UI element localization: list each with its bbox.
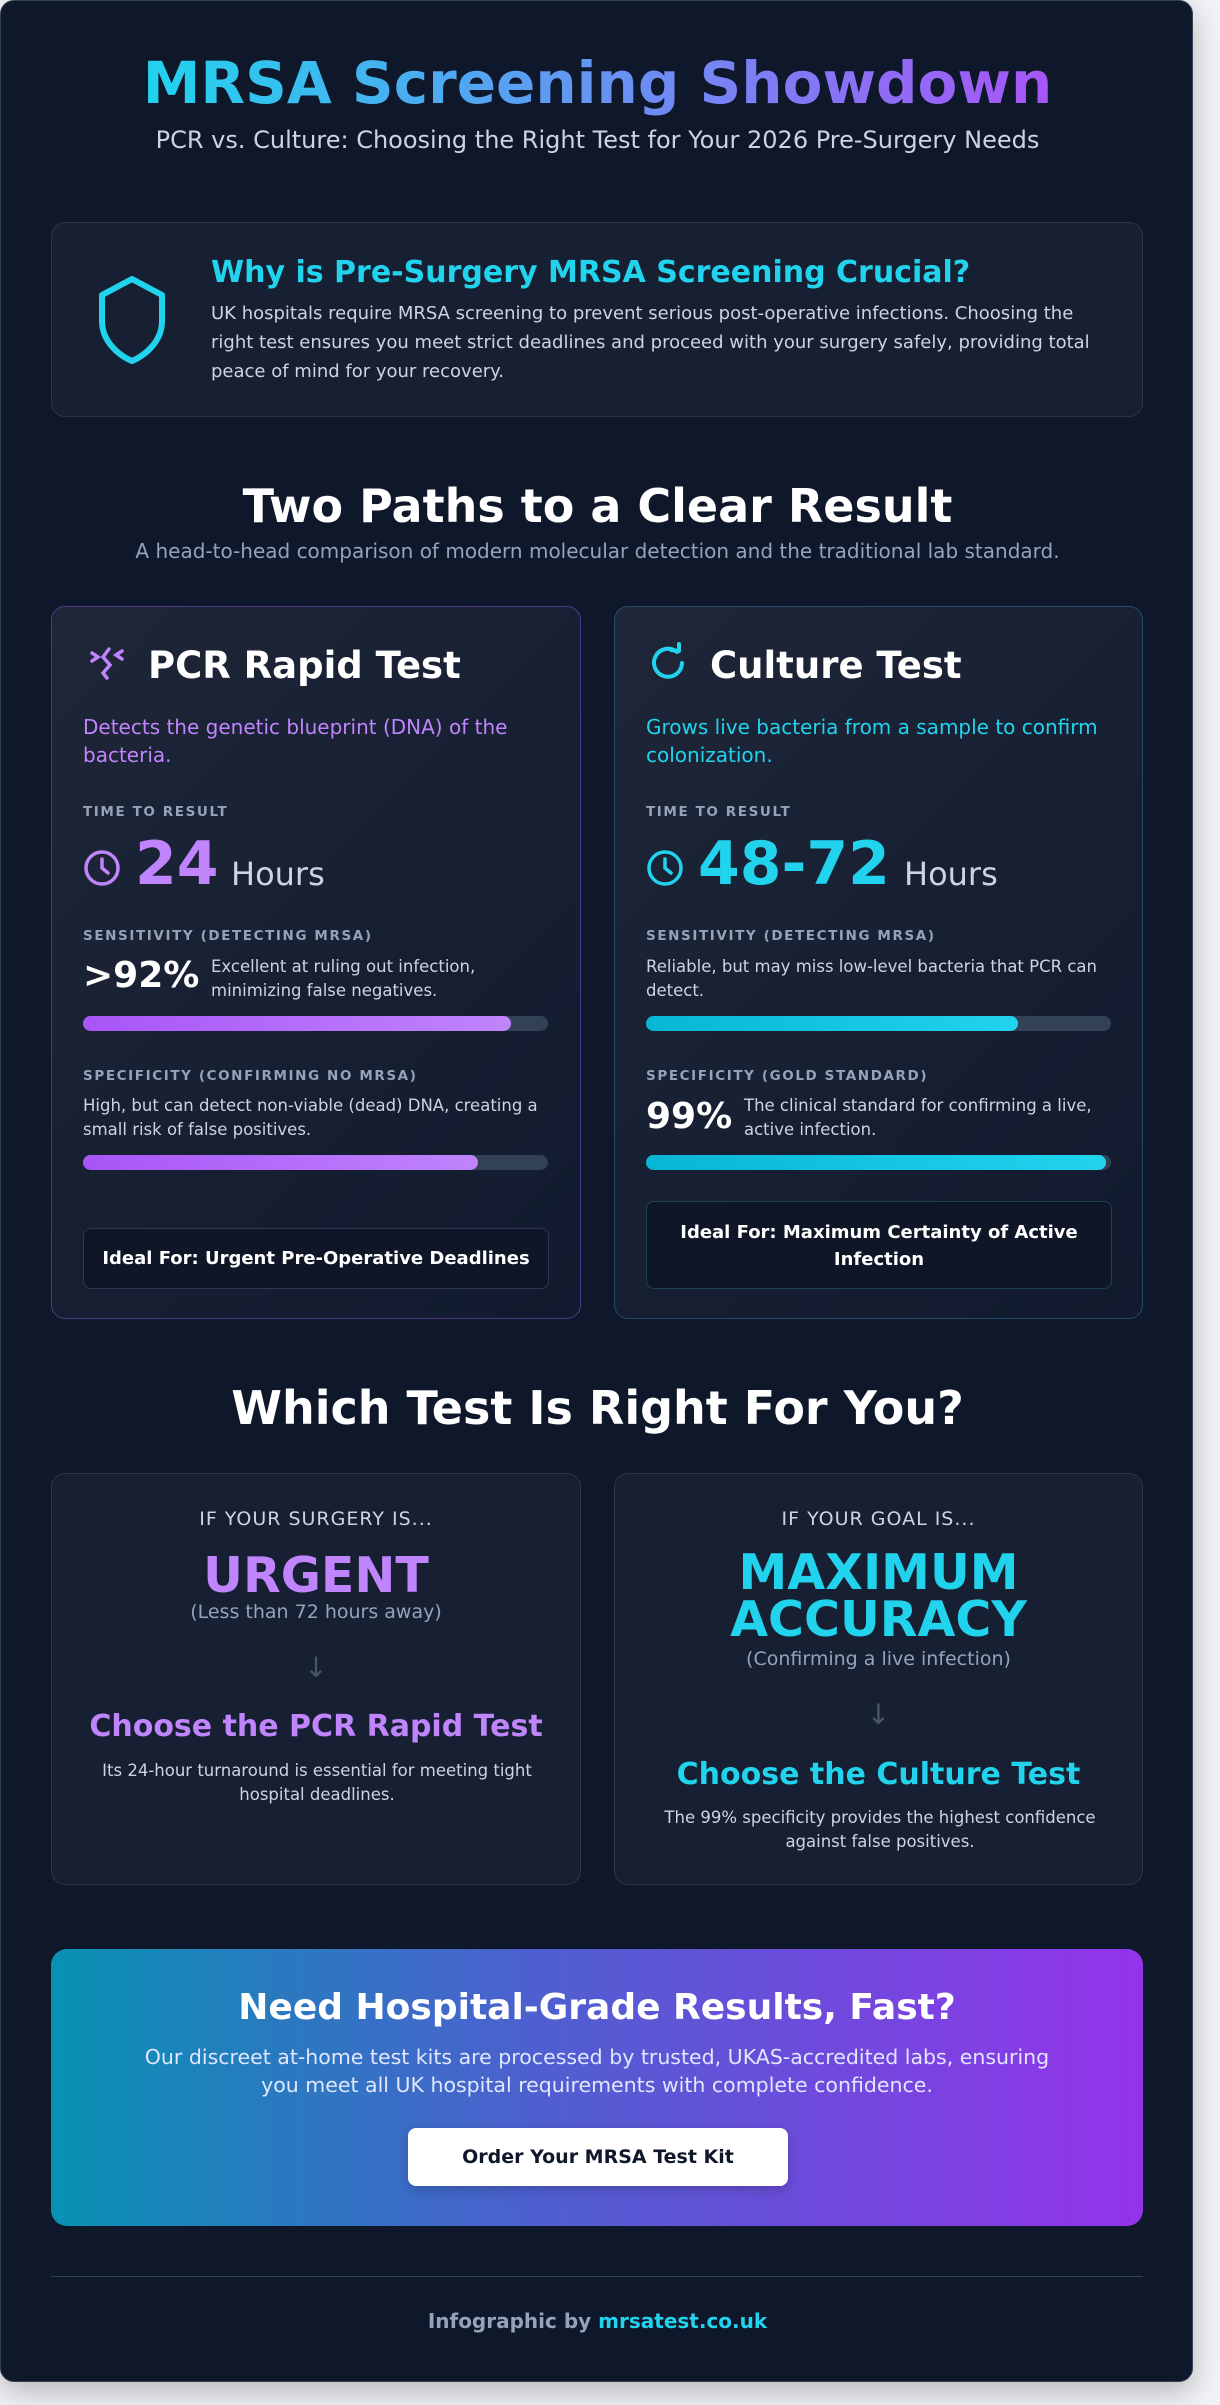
arrow: ↓	[867, 1698, 890, 1731]
subtitle: PCR vs. Culture: Choosing the Right Test for Your 2026 Pre-Surgery Needs	[156, 126, 1039, 154]
ideal for	[646, 1201, 1112, 1289]
panel: urgent: IF YOUR SURGERY IS...	[199, 1508, 433, 1530]
time stat: 48-72	[698, 829, 890, 899]
panel: accuracy	[614, 1473, 1143, 1885]
ideal for	[83, 1228, 549, 1289]
panel: urgent: (Less than 72 hours away)	[190, 1601, 442, 1623]
CTA banner	[51, 1949, 1143, 2226]
panel: PCR: SENSITIVITY (DETECTING MRSA)	[83, 928, 373, 944]
panel: PCR: Excellent at ruling out infection, minimizing false negatives.	[211, 957, 475, 1000]
ideal for: Ideal For: Urgent Pre-Operative Deadlines	[102, 1248, 530, 1269]
subheading: A head-to-head comparison of modern molecular detection and the traditional lab standard.	[135, 539, 1060, 563]
time stat	[647, 829, 998, 899]
icon: refresh	[652, 642, 684, 679]
panel: Culture: The clinical standard for confirming a live, active infection.	[744, 1096, 1092, 1139]
time stat: 24	[135, 829, 218, 899]
panel: accuracy: The 99% specificity provides the highest confidence against false positives.	[664, 1808, 1096, 1851]
description: Detects the genetic blueprint (DNA) of the bacteria.	[83, 715, 507, 767]
panel: PCR: High, but can detect non-viable (dead) DNA, creating a small risk of false positives.	[83, 1096, 538, 1139]
PCR title: PCR Rapid Test	[148, 644, 461, 687]
icon: clock	[647, 850, 683, 886]
footer: Infographic by mrsatest.co.uk	[428, 2309, 767, 2333]
icon: shield	[99, 276, 165, 364]
panel: urgent: Its 24-hour turnaround is essential for meeting tight hospital deadlines.	[102, 1761, 532, 1804]
panel: Culture: TIME TO RESULT	[646, 804, 791, 820]
panel: urgent	[51, 1473, 581, 1885]
heading: which test: Which Test Is Right For You?	[231, 1381, 964, 1435]
ideal for: Ideal For: Maximum Certainty of Active Infection	[680, 1222, 1078, 1270]
accuracy label	[730, 1544, 1028, 1648]
accuracy label: MAXIMUM	[738, 1544, 1018, 1601]
icon: clock	[84, 850, 120, 886]
bar: specificity	[83, 1155, 548, 1170]
panel: accuracy: (Confirming a live infection)	[746, 1648, 1011, 1670]
urgent label: URGENT	[203, 1547, 429, 1604]
time stat: Hours	[231, 855, 325, 893]
panel: Culture	[614, 606, 1143, 1319]
time stat: Hours	[904, 855, 998, 893]
sensitivity stat: >92%	[83, 955, 199, 996]
specificity stat: 99%	[646, 1096, 732, 1137]
button: Order Your MRSA Test Kit	[462, 2146, 734, 2168]
panel: accuracy: IF YOUR GOAL IS...	[782, 1508, 976, 1530]
heading: Why is Pre-Surgery MRSA Screening Crucial?	[211, 255, 970, 290]
recommendation: Choose the PCR Rapid Test	[89, 1709, 543, 1744]
CTA heading: Need Hospital-Grade Results, Fast?	[238, 1987, 956, 2028]
body text: UK hospitals require MRSA screening to prevent serious post-operative infections. Choosing the right test ensures you meet strict deadlines and proceed with your surgery safely, providing total peace of mind for your recovery.	[211, 303, 1090, 382]
panel: Culture: SPECIFICITY (GOLD STANDARD)	[646, 1068, 928, 1084]
accuracy label: ACCURACY	[730, 1591, 1027, 1648]
description: Grows live bacteria from a sample to confirm colonization.	[646, 715, 1098, 767]
heading: two paths: Two Paths to a Clear Result	[243, 479, 952, 533]
panel: why screening	[51, 222, 1143, 417]
bar: sensitivity	[83, 1016, 548, 1031]
recommendation: Choose the Culture Test	[677, 1757, 1080, 1792]
bar: sensitivity	[646, 1016, 1111, 1031]
arrow: ↓	[304, 1651, 328, 1684]
button	[408, 2128, 788, 2186]
panel: PCR	[51, 606, 581, 1319]
title: MRSA Screening Showdown	[143, 49, 1052, 117]
Culture title: Culture Test	[710, 644, 962, 687]
panel: Culture: Reliable, but may miss low-level bacteria that PCR can detect.	[646, 957, 1097, 1000]
panel: PCR: SPECIFICITY (CONFIRMING NO MRSA)	[83, 1068, 418, 1084]
time stat	[84, 829, 325, 899]
panel: PCR: TIME TO RESULT	[83, 804, 228, 820]
panel: Culture: SENSITIVITY (DETECTING MRSA)	[646, 928, 936, 944]
CTA body: Our discreet at-home test kits are processed by trusted, UKAS-accredited labs, ensuring you meet all UK hospital requirements with complete confidence.	[145, 2045, 1049, 2097]
icon: dna	[90, 647, 124, 680]
bar: specificity	[646, 1155, 1111, 1170]
